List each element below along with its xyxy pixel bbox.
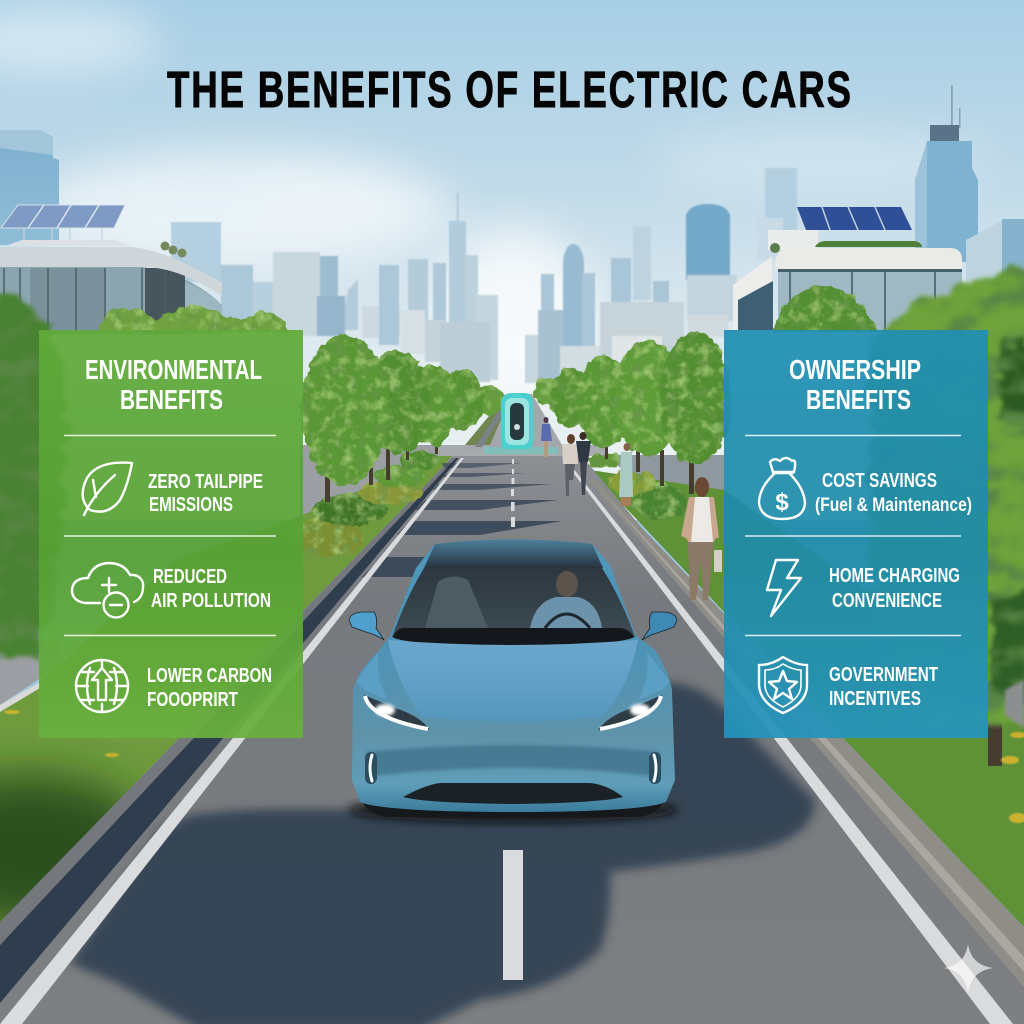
- woman walking: [681, 477, 722, 600]
- right side road behind trees: [600, 455, 724, 510]
- front seat: [425, 576, 488, 628]
- icon: shield with star: [759, 657, 807, 713]
- clouds: [0, 8, 990, 410]
- left foreground blurred tree: [0, 298, 66, 655]
- right grass verge: [590, 470, 1024, 927]
- panel heading: BENEFITS: [120, 384, 223, 415]
- left glass tower: [0, 130, 59, 245]
- left fender highlight: [356, 652, 388, 700]
- roof: [424, 540, 603, 568]
- car shadow: [348, 798, 678, 822]
- item: lower carbon footprint: FOOOPRIRT: [147, 689, 238, 711]
- item: lower carbon footprint: [147, 665, 272, 711]
- item: zero tailpipe emissions: ZERO TAILPIPE: [148, 471, 263, 493]
- item: cost savings: (Fuel & Maintenance): [815, 495, 972, 516]
- crossroad and far road: [438, 394, 608, 456]
- EV charging station: [484, 393, 558, 454]
- woman in dress: [619, 443, 633, 506]
- front grille: [403, 783, 623, 804]
- car body: [352, 540, 675, 812]
- right headlight: [598, 695, 662, 730]
- item: government incentives: GOVERNMENT: [829, 664, 938, 686]
- item: lower carbon footprint: LOWER CARBON: [147, 665, 272, 687]
- item: reduced air pollution: REDUCED: [153, 566, 227, 588]
- left kerb: [0, 458, 459, 1003]
- right foreground blurred tree: [870, 262, 1024, 735]
- panel: environmental benefits: [39, 330, 303, 738]
- bushes right: [589, 453, 687, 520]
- sky: [0, 0, 1024, 520]
- item: home charging convenience: HOME CHARGING: [829, 565, 960, 587]
- electric car: [348, 540, 678, 822]
- left headlight: [364, 695, 430, 730]
- right row of trees: [534, 285, 878, 464]
- item: home charging convenience: [829, 565, 960, 612]
- icon: money bag: [759, 458, 805, 519]
- far right building: [966, 219, 1024, 285]
- right mirror: [642, 612, 677, 640]
- road surface: [0, 456, 1024, 1024]
- grass flowers: [4, 710, 1024, 823]
- distant skyline: [171, 168, 797, 383]
- panel: ownership benefits: [724, 330, 988, 738]
- left row of trees: [98, 308, 506, 486]
- cyclists: [562, 432, 591, 496]
- item: zero tailpipe emissions: [148, 471, 263, 516]
- item: cost savings: [815, 470, 972, 516]
- road shadows: [70, 463, 815, 1024]
- road lines: [0, 458, 1013, 1024]
- icon: globe with up arrow: [76, 660, 128, 712]
- dashboard band: [393, 628, 634, 646]
- right solar building: [733, 207, 962, 332]
- right kerb: [588, 480, 1024, 987]
- right glass tower: [915, 85, 978, 262]
- left mirror: [349, 612, 384, 640]
- item: zero tailpipe emissions: EMISSIONS: [149, 494, 233, 516]
- panel heading: [85, 354, 262, 415]
- hood: [388, 640, 638, 721]
- left grass verge: [0, 456, 452, 925]
- windshield: [392, 568, 635, 646]
- right fender highlight: [638, 652, 670, 700]
- icon: lightning bolt: [767, 560, 801, 616]
- wheels and lower trim: [353, 770, 673, 817]
- lower bumper band: [366, 745, 660, 776]
- panel background: [39, 330, 303, 738]
- distant pedestrian: [541, 417, 552, 457]
- panel background: [724, 330, 988, 738]
- title: THE BENEFITS OF ELECTRIC CARS: [167, 62, 851, 118]
- icon: money bag: $: [775, 489, 789, 516]
- item: home charging convenience: CONVENIENCE: [832, 590, 942, 612]
- tree trunks: [325, 428, 1002, 766]
- panel heading: OWNERSHIP: [789, 354, 921, 385]
- item: government incentives: INCENTIVES: [829, 688, 921, 710]
- panel heading: [789, 354, 921, 415]
- left side road behind trees: [0, 445, 500, 705]
- bushes left: [296, 451, 440, 557]
- driver: [530, 571, 602, 628]
- left solar building: [0, 205, 222, 335]
- panel heading: ENVIRONMENTAL: [85, 354, 262, 385]
- icon: leaf: [83, 463, 132, 515]
- item: government incentives: [829, 664, 938, 710]
- item: reduced air pollution: AIR POLLUTION: [151, 590, 271, 612]
- panel heading: BENEFITS: [806, 384, 911, 415]
- watermark sparkle: [944, 944, 993, 993]
- icon: cloud with plus and minus: [72, 563, 143, 618]
- item: reduced air pollution: [151, 566, 271, 612]
- item: cost savings: COST SAVINGS: [822, 470, 937, 492]
- fog lights: [365, 752, 661, 784]
- side road behind right tree: [1005, 680, 1024, 728]
